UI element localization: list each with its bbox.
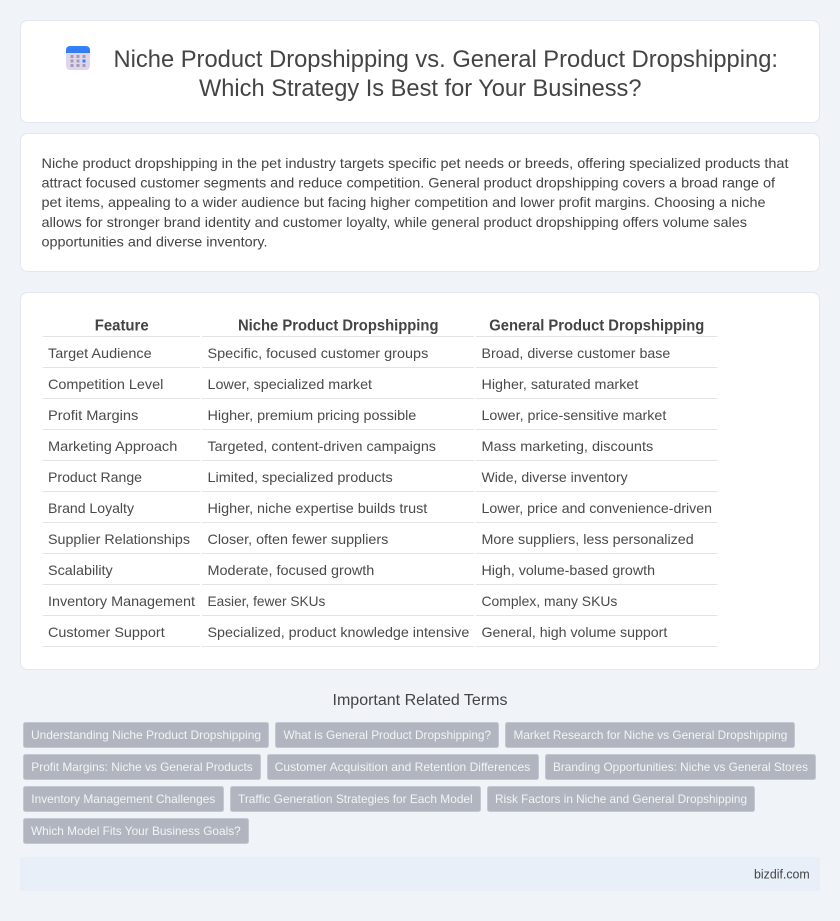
tag	[488, 786, 754, 812]
row: marketing approach: Targeted, content-driven campaigns	[208, 438, 436, 454]
tag	[276, 722, 498, 748]
row: competition level: Lower, specialized market	[208, 376, 372, 392]
row: customer support: Customer Support	[48, 624, 165, 640]
row: profit margins: Higher, premium pricing possible	[208, 407, 417, 423]
row: inventory management: Complex, many SKUs	[482, 593, 617, 609]
row: customer support: General, high volume support	[482, 624, 667, 640]
row: marketing approach: Marketing Approach	[48, 438, 177, 454]
panel: introduction text: pet items, appealing to a wider audience but facing higher competition and lower profit margins. Choosing a niche	[42, 194, 766, 210]
row: scalability	[43, 562, 717, 585]
row: brand loyalty	[43, 500, 717, 523]
table header row	[43, 318, 717, 337]
row: scalability: Scalability	[48, 562, 113, 578]
row: competition level: Higher, saturated market	[482, 376, 638, 392]
icon: calendar	[66, 46, 90, 70]
row: supplier relationships: Supplier Relationships	[48, 531, 190, 547]
row: product range: Wide, diverse inventory	[482, 469, 628, 485]
tag: Understanding Niche Product Dropshipping	[31, 728, 261, 742]
tag: Risk Factors in Niche and General Dropshipping	[495, 792, 747, 806]
row: target audience: Target Audience	[48, 345, 152, 361]
tag: Branding Opportunities: Niche vs General Stores	[553, 760, 808, 774]
title	[114, 46, 778, 102]
tag: Inventory Management Challenges	[31, 792, 215, 806]
tag	[268, 754, 538, 780]
tag: What is General Product Dropshipping?	[284, 728, 491, 742]
row: profit margins: Lower, price-sensitive market	[482, 407, 666, 423]
row: profit margins	[43, 407, 717, 430]
panel: introduction text: attract focused customer segments and reduce competition. General product dropshipping covers a broad range of	[42, 175, 775, 191]
row: inventory management: Easier, fewer SKUs	[208, 593, 325, 609]
row: inventory management: Inventory Management	[48, 593, 195, 609]
row: target audience: Specific, focused customer groups	[208, 345, 428, 361]
table header row: Niche Product Dropshipping	[238, 318, 438, 334]
tag: Which Model Fits Your Business Goals?	[31, 824, 241, 838]
tag	[230, 786, 480, 812]
tag	[24, 786, 224, 812]
row: target audience: Broad, diverse customer base	[482, 345, 671, 361]
table header row: Feature	[95, 318, 149, 334]
row: brand loyalty: Higher, niche expertise builds trust	[208, 500, 427, 516]
row: product range: Limited, specialized products	[208, 469, 393, 485]
tag: Market Research for Niche vs General Dropshipping	[514, 728, 787, 742]
panel: related term tags	[24, 722, 816, 844]
panel: introduction text: Niche product dropshipping in the pet industry targets specific pet needs or breeds, offering specialized products that	[42, 155, 789, 171]
panel: comparison table	[20, 292, 820, 670]
panel: introduction text: allows for stronger brand identity and customer loyalty, while general product dropshipping offers volume sales	[42, 214, 747, 230]
footer bar	[20, 857, 820, 891]
tag: Profit Margins: Niche vs General Products	[31, 760, 253, 774]
row: brand loyalty: Brand Loyalty	[48, 500, 134, 516]
tag	[24, 722, 268, 748]
row: supplier relationships	[43, 531, 717, 554]
panel: title card	[20, 20, 820, 122]
row: product range: Product Range	[48, 469, 142, 485]
row: scalability: High, volume-based growth	[482, 562, 655, 578]
row: customer support: Specialized, product knowledge intensive	[208, 624, 470, 640]
title: Which Strategy Is Best for Your Business?	[199, 75, 642, 102]
row: supplier relationships: More suppliers, less personalized	[482, 531, 694, 547]
title: Niche Product Dropshipping vs. General Product Dropshipping:	[114, 46, 778, 73]
tag	[24, 818, 248, 844]
footer bar: bizdif.com	[754, 866, 810, 881]
table header row: General Product Dropshipping	[489, 318, 704, 334]
tag	[24, 754, 260, 780]
tag	[546, 754, 816, 780]
row: scalability: Moderate, focused growth	[208, 562, 374, 578]
row: marketing approach: Mass marketing, discounts	[482, 438, 653, 454]
heading: important related terms: Important Related Terms	[332, 692, 508, 709]
row: inventory management	[43, 593, 717, 616]
row: competition level: Competition Level	[48, 376, 163, 392]
row: profit margins: Profit Margins	[48, 407, 138, 423]
row: customer support	[43, 624, 717, 647]
tag: Customer Acquisition and Retention Differences	[275, 760, 530, 774]
tag: Traffic Generation Strategies for Each Model	[238, 792, 473, 806]
row: brand loyalty: Lower, price and convenience-driven	[482, 500, 712, 516]
panel: introduction text: opportunities and diverse inventory.	[42, 233, 268, 249]
row: marketing approach	[43, 438, 717, 461]
row: target audience	[43, 345, 717, 368]
tag	[506, 722, 794, 748]
row: product range	[43, 469, 717, 492]
row: supplier relationships: Closer, often fewer suppliers	[208, 531, 388, 547]
panel: introduction text	[20, 134, 820, 272]
row: competition level	[43, 376, 717, 399]
